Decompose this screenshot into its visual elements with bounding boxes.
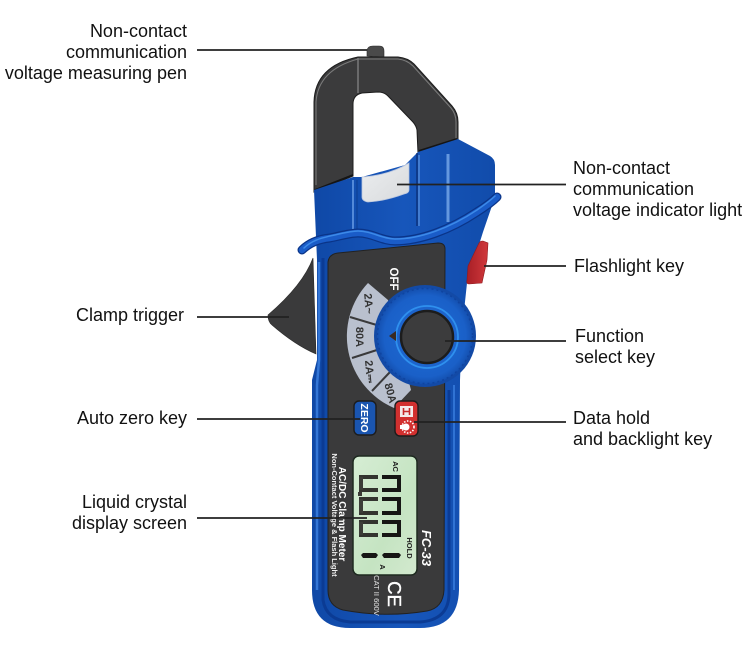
- label: voltage measuring pen: communication: [66, 42, 187, 62]
- model text: AC/DC Clamp Meter: AC/DC Clamp Meter: [336, 467, 347, 561]
- label: flashlight key: Flashlight key: [574, 256, 684, 276]
- LCD screen: [353, 456, 417, 575]
- label: voltage measuring pen: Non-contact: [90, 21, 187, 41]
- label: data hold and backlight key: Data hold: [573, 408, 650, 428]
- label: function select key: select key: [575, 347, 655, 367]
- label: voltage measuring pen: [5, 21, 367, 83]
- icon: voltage measuring pen tip: [367, 46, 384, 57]
- range dial scale: 2A~: [361, 293, 375, 315]
- black control panel: [328, 243, 445, 614]
- auto zero key: ZERO: [358, 403, 370, 433]
- label: voltage indicator light: voltage indicator light: [573, 200, 742, 220]
- label: voltage indicator light: Non-contact: [573, 158, 670, 178]
- meter: clamp meter illustration: [268, 46, 497, 628]
- label: liquid crystal display screen: Liquid crystal: [82, 492, 187, 512]
- LCD A label: A: [378, 564, 387, 570]
- label: liquid crystal display screen: display screen: [72, 513, 187, 533]
- label: auto zero key: Auto zero key: [77, 408, 187, 428]
- label: voltage indicator light: communication: [573, 179, 694, 199]
- data hold and backlight key: [395, 401, 418, 436]
- meter body: [312, 139, 495, 628]
- auto zero key: [354, 401, 376, 435]
- label: voltage measuring pen: voltage measuring pen: [5, 63, 187, 83]
- model text: Non-Contact Voltage and Flash Light: Non-Contact Voltage & Flash Light: [330, 453, 339, 577]
- label: function select key: Function: [575, 326, 644, 346]
- LCD HOLD label: HOLD: [405, 537, 414, 559]
- model number FC-33: FC-33: [419, 530, 434, 567]
- label: voltage indicator light: [397, 158, 742, 220]
- range dial scale: [347, 283, 411, 408]
- flashlight key: [467, 241, 488, 284]
- clamp window: voltage indicator light: [362, 163, 409, 202]
- label: function select key: [445, 326, 655, 367]
- range dial scale: 2A⎓: [362, 360, 376, 384]
- OFF label: OFF: [387, 268, 399, 290]
- LCD digits: [358, 475, 401, 558]
- safety rating CAT II 600V: CAT II 600V: [372, 575, 381, 617]
- label: data hold and backlight key: and backlight key: [573, 429, 712, 449]
- CE mark: CE: [384, 581, 405, 607]
- protective strap: [302, 196, 497, 250]
- label: clamp trigger: Clamp trigger: [76, 305, 184, 325]
- label: liquid crystal display screen: [72, 492, 367, 533]
- body highlights: [317, 153, 454, 622]
- range dial scale: 80A: [353, 327, 365, 347]
- clamp trigger: [268, 258, 316, 354]
- range dial scale: 80A: [381, 382, 398, 405]
- clamp jaw: [314, 57, 458, 192]
- function select knob: [374, 285, 476, 387]
- label: data hold and backlight key: [414, 408, 712, 449]
- LCD AC label: AC: [391, 461, 400, 472]
